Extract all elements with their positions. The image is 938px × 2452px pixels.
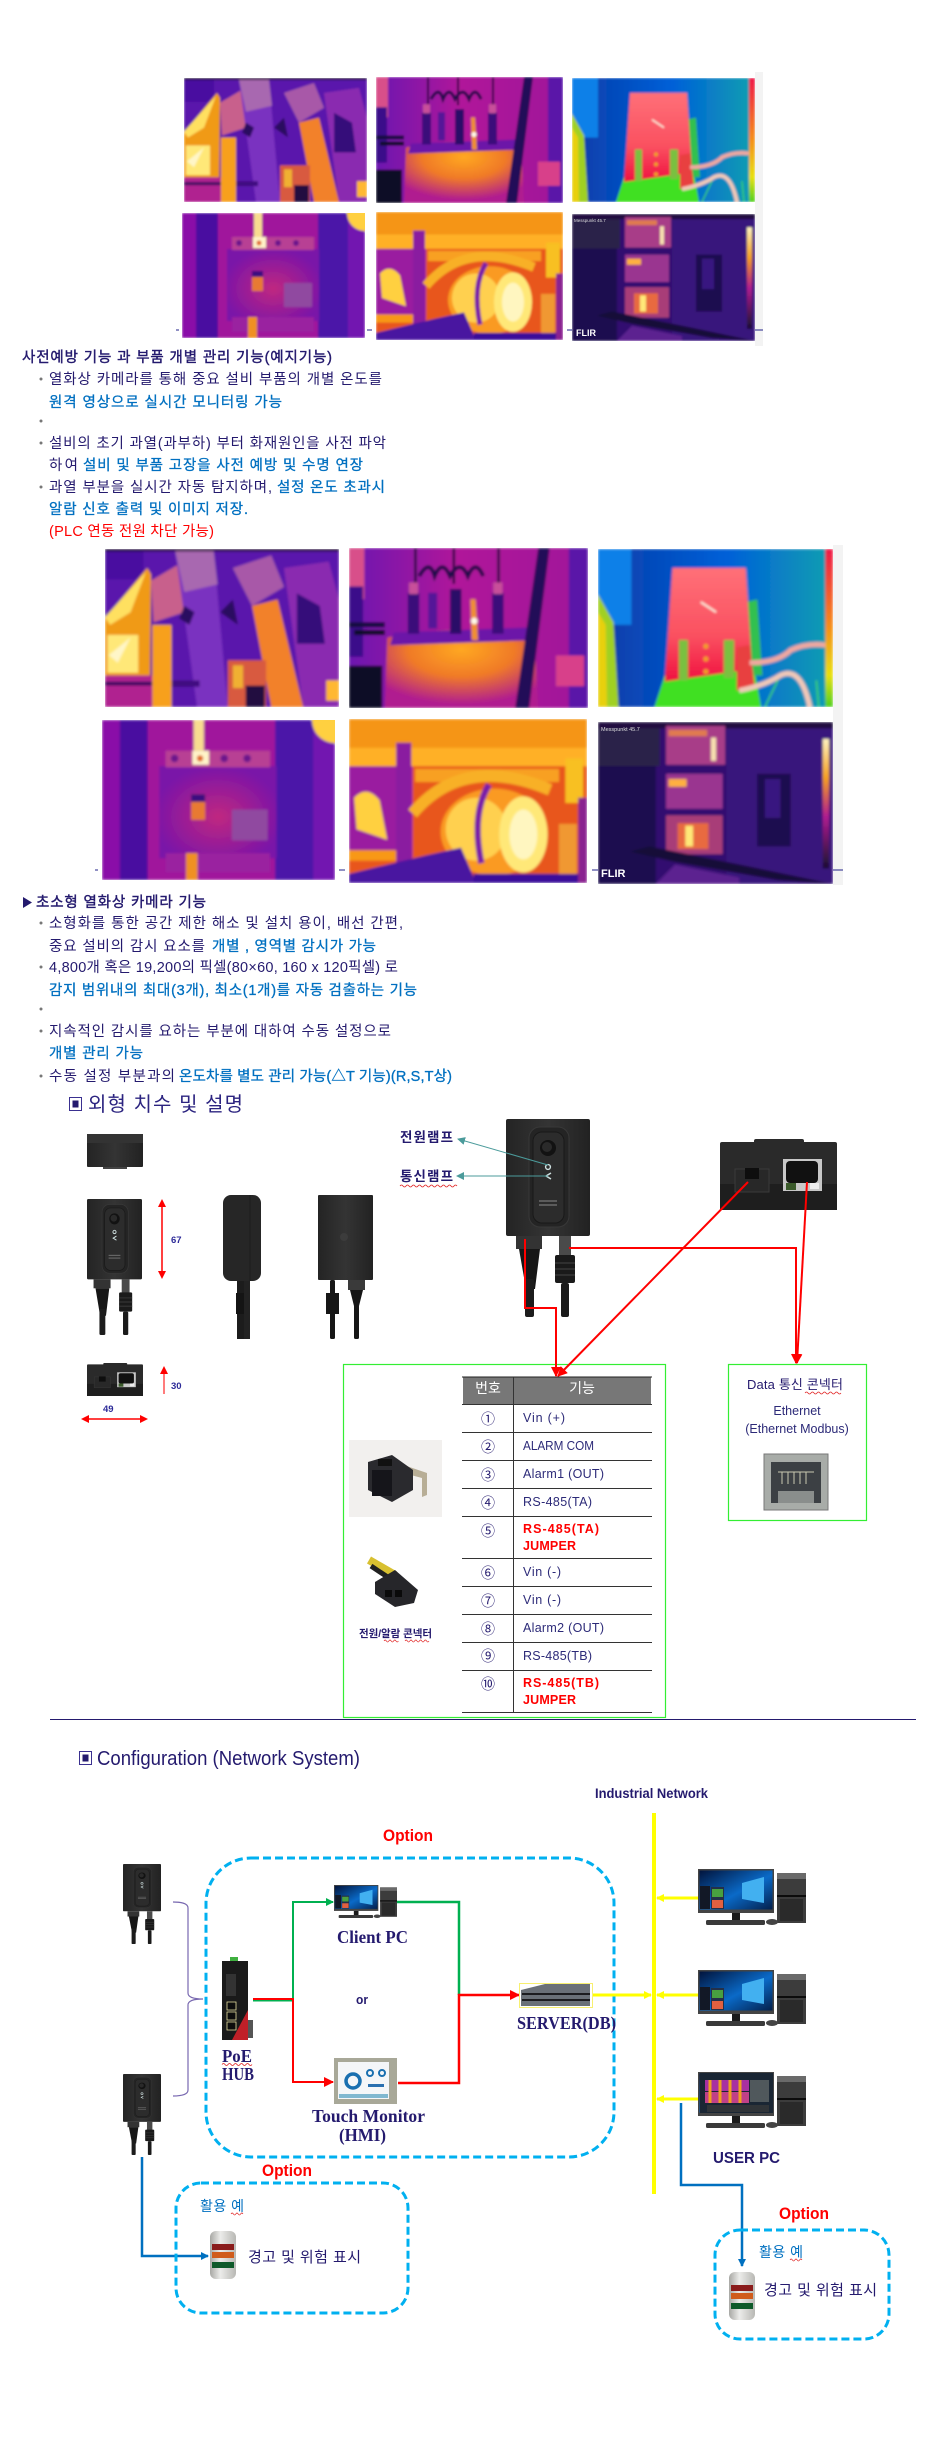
connection: hub to client PC bbox=[253, 1902, 333, 2000]
HMI label bbox=[312, 2106, 425, 2146]
bullets bbox=[40, 923, 43, 1076]
PC 3 user bbox=[698, 2072, 806, 2128]
industrial network bus bbox=[652, 1813, 656, 2194]
connections to bus bbox=[593, 1898, 698, 2099]
client PC label: Client PC bbox=[337, 1927, 408, 1947]
right option label: Option bbox=[779, 2204, 829, 2223]
dimension arrow 67: 67 bbox=[171, 1235, 182, 1246]
device top view bbox=[87, 1134, 143, 1169]
photo: transformer large bbox=[349, 548, 588, 708]
pin numbers: ④ bbox=[481, 1495, 495, 1511]
text block: compact camera function: 소형화를 통한 공간 제한 해소 및 설치 용이, 배선 간편, bbox=[49, 915, 403, 932]
photo: FLIR cabinet bbox=[572, 214, 755, 341]
pin numbers: ⑥ bbox=[481, 1565, 495, 1581]
bullets bbox=[40, 379, 43, 487]
text block: compact camera function: 개별 관리 가능 bbox=[49, 1045, 143, 1062]
icon: triangle bbox=[23, 897, 32, 908]
pin functions: JUMPER bbox=[523, 1693, 576, 1707]
dash marks row 2 bbox=[95, 869, 843, 871]
photo: FLIR cabinet large bbox=[598, 722, 833, 884]
option box right bbox=[715, 2230, 889, 2339]
heading: dimensions: 외형 치수 및 설명 bbox=[88, 1093, 243, 1116]
photo: panel rainbow large bbox=[598, 549, 833, 707]
text block: predictive function bbox=[22, 349, 386, 540]
photo: FLIR cabinet large: FLIR bbox=[601, 868, 625, 880]
panel: data connector: Ethernet bbox=[773, 1404, 821, 1418]
HMI label: (HMI) bbox=[339, 2125, 386, 2146]
photo: bus bars bbox=[184, 78, 367, 202]
device port view small bbox=[87, 1363, 143, 1396]
connection: user PC to alarm bbox=[681, 2103, 742, 2266]
table header bbox=[462, 1377, 652, 1404]
pin functions: RS-485(TB) bbox=[523, 1649, 592, 1663]
left option label: Option bbox=[262, 2161, 312, 2180]
HMI label: Touch Monitor bbox=[312, 2106, 425, 2126]
text block: predictive function: 하여 bbox=[49, 457, 78, 474]
PC 2 bbox=[698, 1970, 806, 2026]
text block: compact camera function: 지속적인 감시를 요하는 부분에 대하여 수동 설정으로 bbox=[49, 1023, 391, 1040]
icon: RJ45 socket bbox=[764, 1454, 828, 1510]
dimension arrow 30 bbox=[160, 1366, 182, 1394]
divider bbox=[50, 1718, 916, 1720]
panel: thermal photo grid 1 bbox=[176, 72, 763, 346]
photo: motor bbox=[376, 212, 563, 340]
pin numbers: ③ bbox=[481, 1467, 495, 1483]
dimension arrow 49 bbox=[81, 1404, 148, 1423]
photo: breaker bbox=[182, 195, 383, 338]
pin functions: Alarm1 (OUT) bbox=[523, 1467, 604, 1481]
photo: FLIR cabinet large: Messpunkt 45.7 bbox=[601, 727, 640, 733]
dimension arrow 49: 49 bbox=[103, 1404, 114, 1415]
photo: transformer bbox=[376, 77, 563, 203]
text block: compact camera function: 중요 설비의 감시 요소를 bbox=[49, 938, 205, 955]
text block: predictive function: 열화상 카메라를 통해 중요 설비 부품의 개별 온도를 bbox=[49, 371, 382, 388]
pin functions: ALARM COM bbox=[523, 1439, 594, 1453]
pin numbers: ⑧ bbox=[481, 1621, 495, 1637]
port view device bbox=[720, 1139, 837, 1210]
pin functions: Alarm2 (OUT) bbox=[523, 1621, 604, 1635]
photo: FLIR cabinet: Messpunkt 45.7 bbox=[574, 218, 606, 223]
pin functions bbox=[523, 1411, 604, 1707]
panel: power and alarm connector pinout bbox=[344, 1364, 666, 1718]
lamp labels: 전원램프 bbox=[400, 1130, 453, 1145]
pin numbers: ⑤ bbox=[481, 1523, 495, 1539]
main device bbox=[506, 1119, 590, 1317]
text block: predictive function: (PLC 연동 전원 차단 가능) bbox=[49, 523, 214, 540]
photo: breaker large bbox=[102, 697, 358, 880]
lamp labels: 통신램프 bbox=[400, 1169, 453, 1184]
text block: compact camera function bbox=[23, 894, 452, 1085]
panel: thermal photo grid 2 bbox=[95, 545, 843, 885]
panel: network diagram bbox=[123, 1785, 889, 2339]
option box right: 경고 및 위험 표시 bbox=[764, 2282, 877, 2299]
panel: dimension views bbox=[81, 1134, 373, 1423]
user PC label: USER PC bbox=[713, 2150, 780, 2167]
photo: panel rainbow bbox=[572, 78, 755, 202]
client PC bbox=[334, 1885, 397, 1918]
photo: motor large bbox=[349, 719, 587, 883]
device front view bbox=[87, 1199, 142, 1335]
option box left: 활용 예 bbox=[200, 2198, 244, 2214]
arrows: lamp leaders bbox=[457, 1139, 548, 1176]
connector photo bbox=[349, 1440, 442, 1517]
pin functions: Vin (-) bbox=[523, 1593, 561, 1607]
pin numbers: ① bbox=[481, 1411, 495, 1427]
second sensor bbox=[123, 2074, 161, 2155]
text block: compact camera function: 감지 범위내의 최대(3개), 최소(1개)를 자동 검출하는 기능 bbox=[49, 982, 417, 999]
text block: predictive function: 과열 부분을 실시간 자동 탐지하며, bbox=[49, 479, 272, 496]
panel: data connector: (Ethernet Modbus) bbox=[745, 1422, 849, 1436]
photo: FLIR cabinet: FLIR bbox=[576, 328, 596, 338]
HMI bbox=[334, 2058, 397, 2104]
PC 1 bbox=[698, 1869, 806, 1925]
connection: hub to HMI bbox=[253, 1999, 333, 2082]
connection: HMI to server bbox=[398, 1995, 519, 2083]
pin functions: Vin (-) bbox=[523, 1565, 561, 1579]
brace bbox=[173, 1902, 203, 2096]
hub label: PoE bbox=[222, 2046, 252, 2066]
pin numbers: ② bbox=[481, 1439, 495, 1455]
pin functions: JUMPER bbox=[523, 1539, 576, 1553]
sensors bbox=[123, 1864, 161, 1944]
text block: predictive function: 설정 온도 초과시 bbox=[277, 479, 385, 496]
server bbox=[520, 1984, 592, 2008]
dash marks row 1 bbox=[176, 329, 763, 331]
text block: predictive function: 설비의 초기 과열(과부하) 부터 화재원인을 사전 파악 bbox=[49, 435, 386, 452]
heading: configuration: Configuration (Network System) bbox=[97, 1748, 360, 1770]
panel: data connector: Data 통신 콘넥터 bbox=[747, 1377, 843, 1392]
or label: or bbox=[356, 1992, 368, 2007]
pin table bbox=[462, 1377, 652, 1712]
device side view bbox=[223, 1195, 261, 1339]
option box main bbox=[206, 1826, 614, 2157]
pin numbers: ⑩ bbox=[481, 1676, 495, 1692]
dimension arrow 67 bbox=[158, 1199, 182, 1279]
server label: SERVER(DB) bbox=[517, 2013, 616, 2034]
pin functions: RS-485(TB) bbox=[523, 1676, 599, 1690]
cable connector photo bbox=[369, 1560, 418, 1607]
icon: tower light bbox=[729, 2272, 755, 2320]
text block: predictive function: 원격 영상으로 실시간 모니터링 가능 bbox=[49, 394, 282, 411]
text block: predictive function: 설비 및 부품 고장을 사전 예방 및 수명 연장 bbox=[83, 457, 363, 474]
lamp labels bbox=[400, 1130, 457, 1187]
heading: 초소형 열화상 카메라 기능 bbox=[36, 894, 206, 911]
table header: 기능 bbox=[569, 1380, 595, 1396]
pin functions: RS-485(TA) bbox=[523, 1522, 599, 1536]
pin functions: RS-485(TA) bbox=[523, 1495, 592, 1509]
text block: compact camera function: 개별 , 영역별 감시가 가능 bbox=[212, 938, 376, 955]
connector caption: 전원/알람 콘넥터 bbox=[359, 1627, 432, 1640]
pin functions: Vin (+) bbox=[523, 1411, 565, 1425]
table header: 번호 bbox=[475, 1380, 501, 1396]
device back view bbox=[318, 1195, 373, 1339]
photo: bus bars large bbox=[105, 549, 339, 707]
PoE hub bbox=[222, 1957, 253, 2040]
connection: client PC to junction bbox=[397, 1902, 459, 1995]
panel: data connector bbox=[728, 1364, 866, 1520]
text block: compact camera function: 수동 설정 부분과의 bbox=[49, 1068, 175, 1085]
icon: tower light left bbox=[210, 2231, 236, 2279]
industrial network label: Industrial Network bbox=[595, 1785, 708, 1801]
connection: sensor to alarm bbox=[142, 2157, 208, 2256]
hub label: HUB bbox=[222, 2064, 254, 2084]
panel: device lamps and wiring bbox=[400, 1119, 837, 1376]
text block: compact camera function: 4,800개 혹은 19,200의 픽셀(80×60, 160 x 120픽셀) 로 bbox=[49, 958, 398, 976]
pin numbers bbox=[481, 1411, 495, 1692]
pin numbers: ⑦ bbox=[481, 1593, 495, 1609]
pin numbers: ⑨ bbox=[481, 1648, 495, 1664]
option box left: 경고 및 위험 표시 bbox=[248, 2249, 361, 2266]
hub label bbox=[222, 2046, 254, 2084]
option box left bbox=[176, 2183, 408, 2313]
option box main: Option bbox=[383, 1826, 433, 1845]
dimension arrow 30: 30 bbox=[171, 1381, 182, 1392]
text block: predictive function: 알람 신호 출력 및 이미지 저장. bbox=[49, 501, 248, 518]
heading: 사전예방 기능 과 부품 개별 관리 기능(예지기능) bbox=[22, 349, 332, 366]
option box right: 활용 예 bbox=[759, 2244, 803, 2260]
arrows: connector to table bbox=[525, 1182, 807, 1376]
text block: compact camera function: 온도차를 별도 관리 가능(△T 기능)(R,S,T상) bbox=[179, 1068, 452, 1085]
